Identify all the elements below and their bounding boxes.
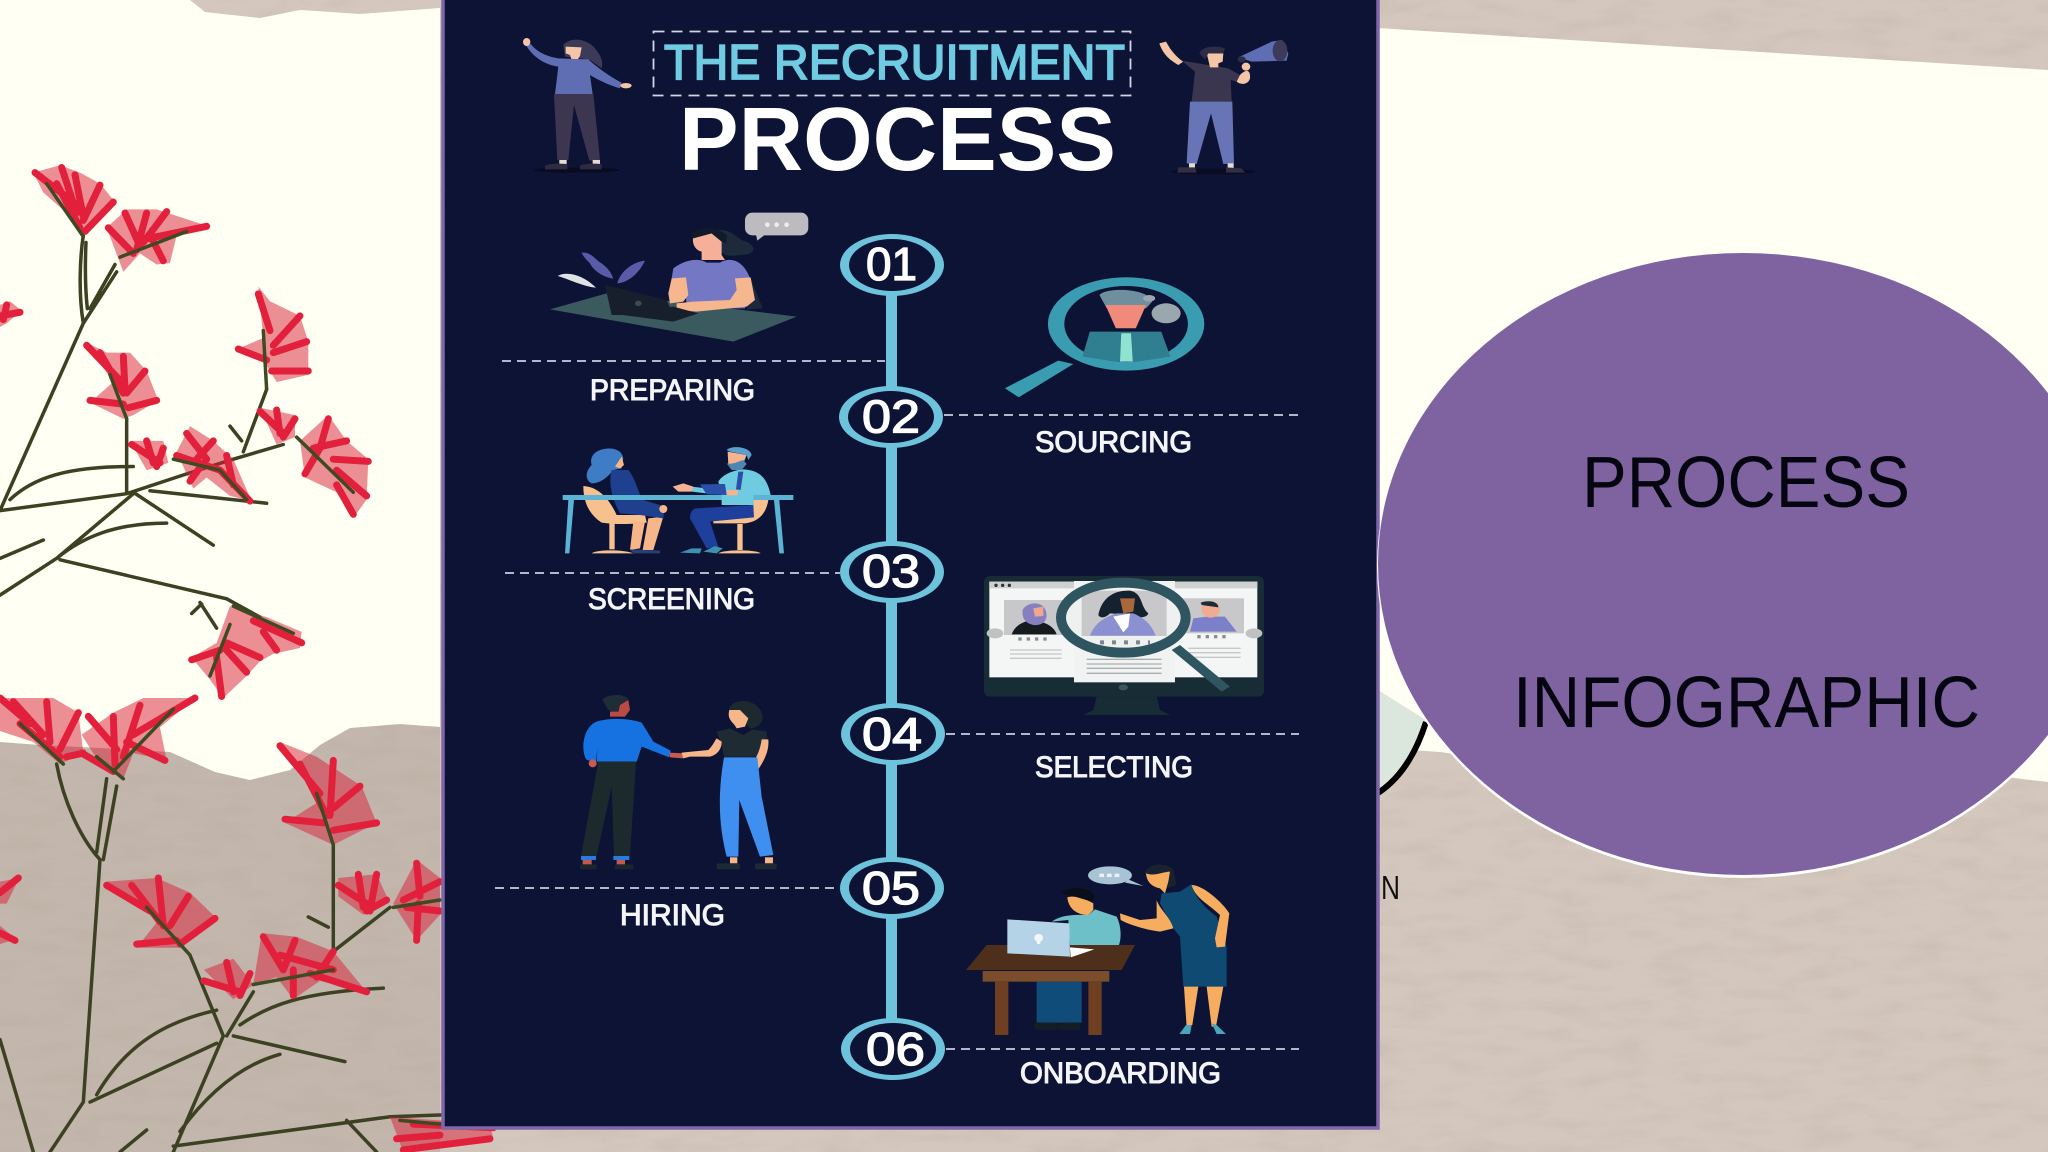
step 03: screening: SCREENING <box>588 583 755 616</box>
icon: person waving, left <box>523 38 632 173</box>
main infographic panel <box>443 0 1378 1128</box>
icon: selecting, monitor with candidate profiles <box>984 576 1264 715</box>
icon: person with megaphone, right <box>1159 40 1288 175</box>
step 05: hiring <box>495 857 944 932</box>
blossom masses: lower branch <box>0 698 493 1152</box>
step 01: preparing: 01 <box>866 238 917 290</box>
flower plant: upper branch <box>0 165 368 698</box>
step 01: preparing <box>502 234 944 407</box>
step 01: preparing: PREPARING <box>590 374 755 407</box>
purple ellipse callout <box>1377 253 2048 878</box>
torn paper: left cream area <box>0 0 440 780</box>
blossom petals: upper branch <box>0 168 368 696</box>
title: process: PROCESS <box>679 90 1116 190</box>
callout text: process: PROCESS <box>1582 443 1910 523</box>
step 06: onboarding: ONBOARDING <box>1020 1057 1221 1090</box>
step 06: onboarding <box>841 1018 1299 1090</box>
step 05: hiring: HIRING <box>620 899 725 932</box>
step 05: hiring: 05 <box>862 862 920 914</box>
title: the recruitment: THE RECRUITMENT <box>664 36 1125 90</box>
hidden slide fragment: black arc <box>1378 690 1426 793</box>
step 03: screening <box>505 541 944 616</box>
stems: upper branch <box>0 235 283 628</box>
icon: preparing, woman at laptop <box>550 213 808 342</box>
blossom cores: upper branch <box>47 184 353 676</box>
step 04: selecting <box>841 703 1299 784</box>
torn paper: right cream area <box>1378 28 2048 782</box>
blossom petals: lower branch <box>0 698 493 1150</box>
callout text: infographic: INFOGRAPHIC <box>1513 663 1980 743</box>
step 06: onboarding: 06 <box>866 1023 925 1075</box>
icon: hiring, handshake <box>580 695 777 869</box>
flower plant: lower branch <box>0 698 493 1152</box>
blossom cores: lower branch <box>20 709 440 1124</box>
step 02: sourcing: SOURCING <box>1035 426 1192 459</box>
timeline spine <box>886 265 897 1050</box>
icon: sourcing, magnifier with candidate <box>1005 277 1204 397</box>
step 03: screening: 03 <box>862 545 920 597</box>
step 02: sourcing <box>839 386 1299 459</box>
step 02: sourcing: 02 <box>862 390 920 442</box>
fragment letter: N <box>1381 869 1400 906</box>
step 04: selecting: SELECTING <box>1035 751 1193 784</box>
stems: lower branch <box>0 764 493 1152</box>
icon: onboarding, manager and employee at desk <box>966 865 1229 1035</box>
step 04: selecting: 04 <box>862 708 922 760</box>
icon: screening, interview at table <box>563 447 793 553</box>
blossom masses: upper branch <box>0 165 368 698</box>
